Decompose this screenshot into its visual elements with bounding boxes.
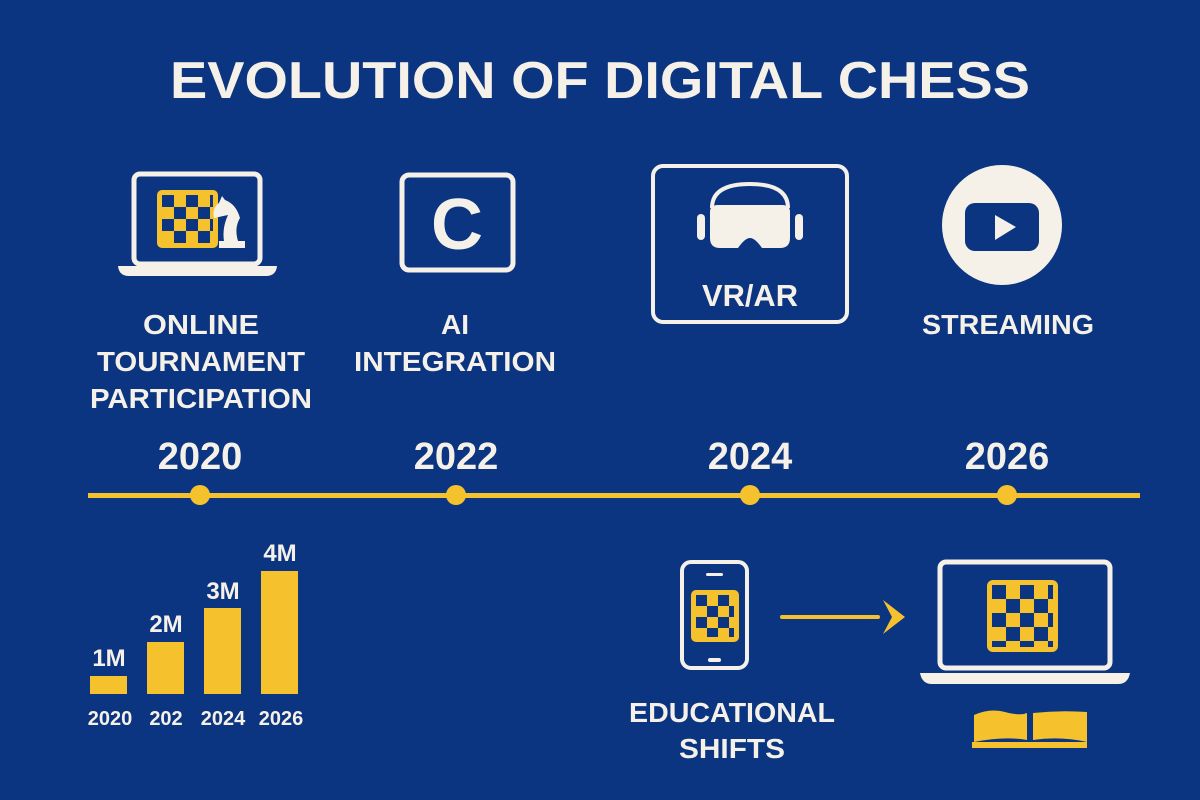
label: educational shifts: SHIFTS (679, 733, 785, 764)
years (158, 436, 1049, 478)
icon: AI box: C (431, 185, 483, 265)
label: AI integration: INTEGRATION (354, 346, 556, 377)
bar chart: 2M (149, 611, 183, 638)
years: 2020 (158, 436, 242, 478)
panel: VR/AR (653, 166, 847, 322)
label: educational shifts (629, 697, 835, 764)
years: 2024 (708, 436, 792, 478)
title: EVOLUTION OF DIGITAL CHESS (170, 52, 1030, 110)
panel: VR/AR: VR/AR (702, 278, 798, 313)
icon: laptop with chessboard (118, 174, 277, 276)
label: AI integration (354, 309, 556, 377)
label: online tournament: ONLINE (143, 309, 259, 340)
icon: book (972, 711, 1087, 748)
label: streaming: STREAMING (922, 309, 1094, 340)
bar chart: 202 (149, 708, 183, 730)
bar chart: 4M (263, 540, 297, 567)
bar chart: 1M (92, 645, 126, 672)
bar chart: 3M (206, 578, 240, 605)
icon: laptop 2 (920, 562, 1130, 684)
label: online tournament: PARTICIPATION (90, 383, 312, 414)
bar chart: 2024 (201, 708, 246, 730)
label: online tournament: TOURNAMENT (97, 346, 305, 377)
bar chart (88, 540, 303, 730)
years: 2026 (965, 436, 1049, 478)
timeline (88, 485, 1140, 505)
icon: streaming (942, 165, 1062, 285)
bar chart: 2020 (88, 708, 132, 730)
label: online tournament (90, 309, 312, 414)
arrow (780, 600, 905, 634)
icon: AI box (402, 175, 513, 270)
bar chart: 2026 (259, 708, 303, 730)
years: 2022 (414, 436, 498, 478)
label: AI integration: AI (441, 309, 469, 340)
icon: phone (682, 562, 747, 668)
label: educational shifts: EDUCATIONAL (629, 697, 835, 728)
